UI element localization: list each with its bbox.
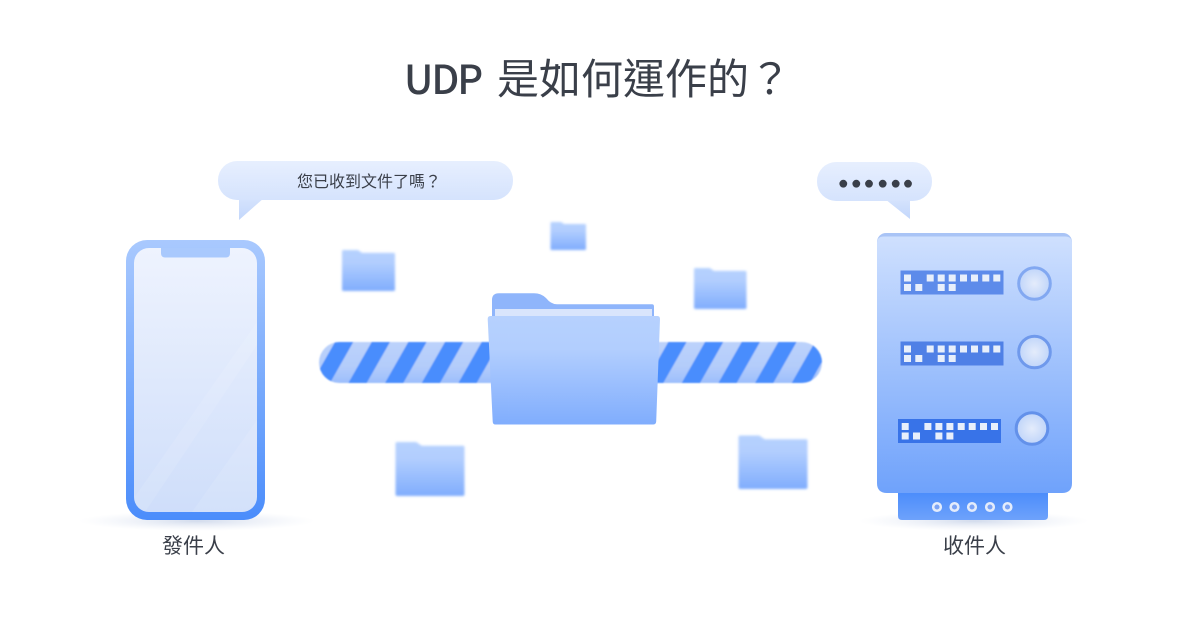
floating folder 1 xyxy=(342,250,395,291)
phone screen xyxy=(134,248,257,512)
screen reflections xyxy=(134,322,257,512)
floating folder 3 xyxy=(694,268,746,309)
speech bubble: sender xyxy=(218,161,513,220)
server unit 1 xyxy=(900,268,1050,299)
panel: sender phone xyxy=(112,240,282,528)
floating folder 5 xyxy=(738,436,808,489)
panel 2 lights xyxy=(904,346,1000,362)
knob 1 xyxy=(1019,268,1050,299)
receiver label: 收件人 xyxy=(943,530,1006,560)
folder front xyxy=(488,316,660,424)
panel 3 lights xyxy=(902,423,998,440)
bubble body xyxy=(817,162,932,201)
bar stripes xyxy=(312,342,833,383)
panel: receiver server xyxy=(859,233,1089,531)
title: 是如何運作的？ xyxy=(497,46,791,107)
striped transfer bar xyxy=(312,342,833,383)
knob 3 xyxy=(1016,413,1048,444)
server unit 2 xyxy=(900,336,1050,368)
server base xyxy=(898,493,1048,520)
server top edge xyxy=(877,233,1072,263)
sender label: 發件人 xyxy=(162,530,225,560)
infographic: how UDP works xyxy=(112,58,1072,555)
bar background xyxy=(319,342,822,383)
folder back with tab xyxy=(492,293,654,330)
main folder xyxy=(488,293,660,424)
title: UDP xyxy=(404,48,482,106)
status panel 3 xyxy=(898,419,1001,443)
phone ground shadow xyxy=(79,511,315,531)
server ground shadow xyxy=(859,511,1089,531)
bubble body xyxy=(218,161,513,200)
bubble text: 您已收到文件了嗎？ xyxy=(297,168,441,192)
bubble tail xyxy=(885,199,910,219)
speech bubble: receiver xyxy=(817,162,932,219)
floating folder 4 xyxy=(396,442,464,496)
status panel 1 xyxy=(900,270,1004,294)
server unit 3 xyxy=(898,413,1048,444)
server body xyxy=(877,236,1072,493)
folder paper xyxy=(495,309,652,321)
panel 1 lights xyxy=(904,274,1000,291)
phone notch xyxy=(161,248,230,258)
masked reply dots xyxy=(839,180,912,188)
phone frame xyxy=(126,240,265,520)
server base holes xyxy=(933,503,1011,511)
status panel 2 xyxy=(900,342,1004,366)
bubble tail xyxy=(239,198,264,220)
knob 2 xyxy=(1019,336,1050,368)
floating folder 2 xyxy=(550,222,586,250)
